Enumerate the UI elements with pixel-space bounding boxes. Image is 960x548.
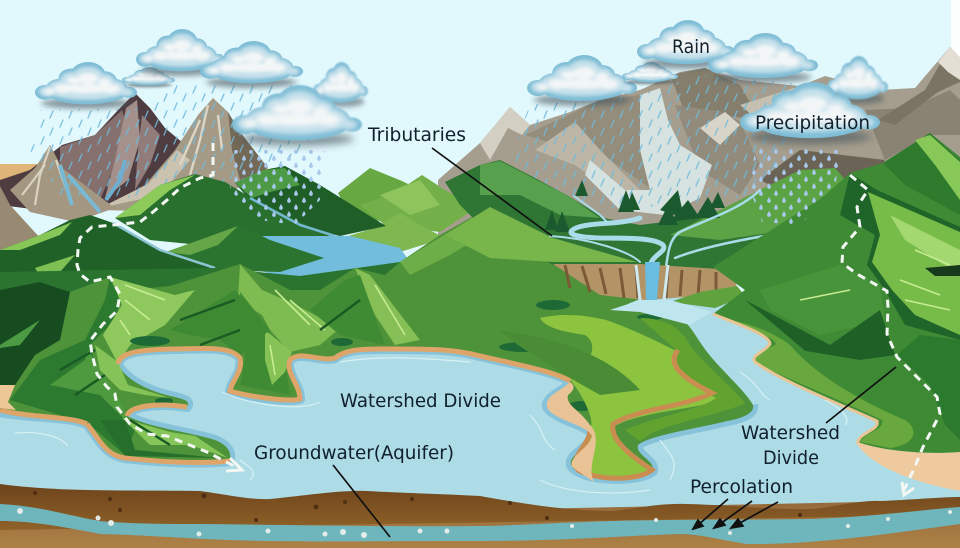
main lake	[0, 296, 960, 516]
right mountain range	[438, 47, 960, 240]
right shoreline sand edge	[713, 314, 877, 442]
label: Groundwater (Aquifer): Groundwater(Aquifer)	[254, 442, 454, 464]
back light green hills	[338, 168, 476, 252]
aquifer pebbles	[17, 508, 952, 538]
valley behind the waterfall	[445, 160, 850, 280]
leader line: watershed divide	[826, 367, 896, 423]
label: Watershed Divide (right): Divide	[763, 447, 819, 469]
left lake shore bank	[0, 348, 570, 462]
percolation arrows	[693, 499, 778, 529]
right sand beach	[855, 441, 960, 491]
right page margin	[951, 0, 960, 50]
label: Precipitation: Precipitation	[755, 112, 870, 134]
left dark mountain mass	[0, 277, 135, 455]
label: Watershed Divide (lake): Watershed Divide	[340, 390, 501, 412]
label: Watershed Divide (right)	[741, 422, 840, 469]
aquifer band	[0, 504, 960, 544]
lower earth layer	[0, 500, 960, 548]
label: Rain: Rain	[672, 36, 710, 58]
brown cliff face	[553, 264, 745, 308]
shrubs on the hills	[130, 300, 716, 418]
dashed route: left watershed divide	[77, 143, 242, 471]
clouds: right group	[527, 20, 888, 144]
dashed route: right watershed divide	[842, 175, 940, 495]
back lake	[240, 235, 410, 282]
label: Percolation: Percolation	[690, 476, 793, 498]
leader line: groundwater	[333, 465, 390, 537]
hill base joining back hills to the lake shore	[0, 262, 400, 320]
green peninsula with brown banks	[500, 315, 745, 482]
soil specks	[33, 491, 802, 522]
sky background	[0, 0, 951, 300]
clouds: left group	[35, 29, 368, 146]
sandy and blue shoreline margin	[0, 348, 753, 479]
icon: glacier snowfield	[585, 88, 712, 215]
right green hills	[713, 133, 960, 453]
label: Watershed Divide (right): Watershed	[741, 422, 840, 444]
icon: pine trees	[545, 180, 725, 232]
water ripples	[15, 358, 847, 493]
leader line: tributaries	[432, 148, 552, 236]
front ridge light faces	[60, 207, 500, 458]
tributary streams	[550, 190, 770, 305]
left and central land	[0, 207, 753, 479]
underground layers	[0, 484, 960, 548]
label: Tributaries: Tributaries	[367, 124, 466, 146]
light rain over mountains	[30, 75, 810, 210]
distant sand plain	[0, 164, 60, 204]
icon: waterfall	[610, 262, 712, 325]
upper earth layer	[0, 484, 960, 530]
foreground rain drops	[230, 148, 840, 225]
left mountains	[0, 93, 268, 250]
dark green hills with snow-melt streams	[0, 166, 386, 300]
